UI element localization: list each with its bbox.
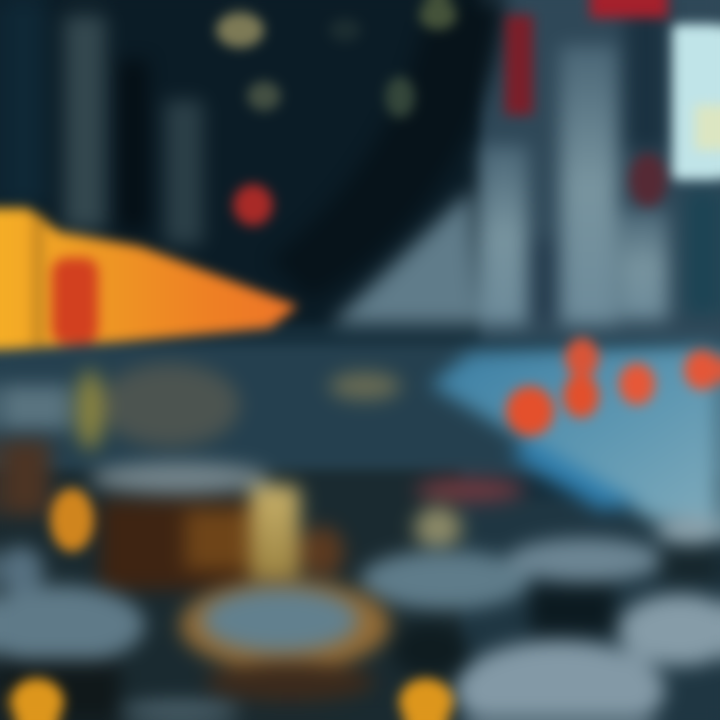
lower left warm shapes xyxy=(0,440,462,590)
light blue floor xyxy=(430,345,720,535)
round brown table xyxy=(120,579,468,720)
dark vertical columns top left xyxy=(0,0,203,245)
grey blue tables xyxy=(0,516,720,720)
blue grey buildings xyxy=(330,0,720,325)
olive lights xyxy=(216,0,457,118)
red lights top xyxy=(233,0,668,226)
orange wedge xyxy=(0,208,298,350)
orange-red dots xyxy=(506,338,720,436)
amber glow xyxy=(50,488,94,552)
bright screen xyxy=(672,24,720,180)
mid band details xyxy=(0,363,525,502)
bottom amber lights xyxy=(10,678,453,720)
dark arc xyxy=(270,0,505,300)
